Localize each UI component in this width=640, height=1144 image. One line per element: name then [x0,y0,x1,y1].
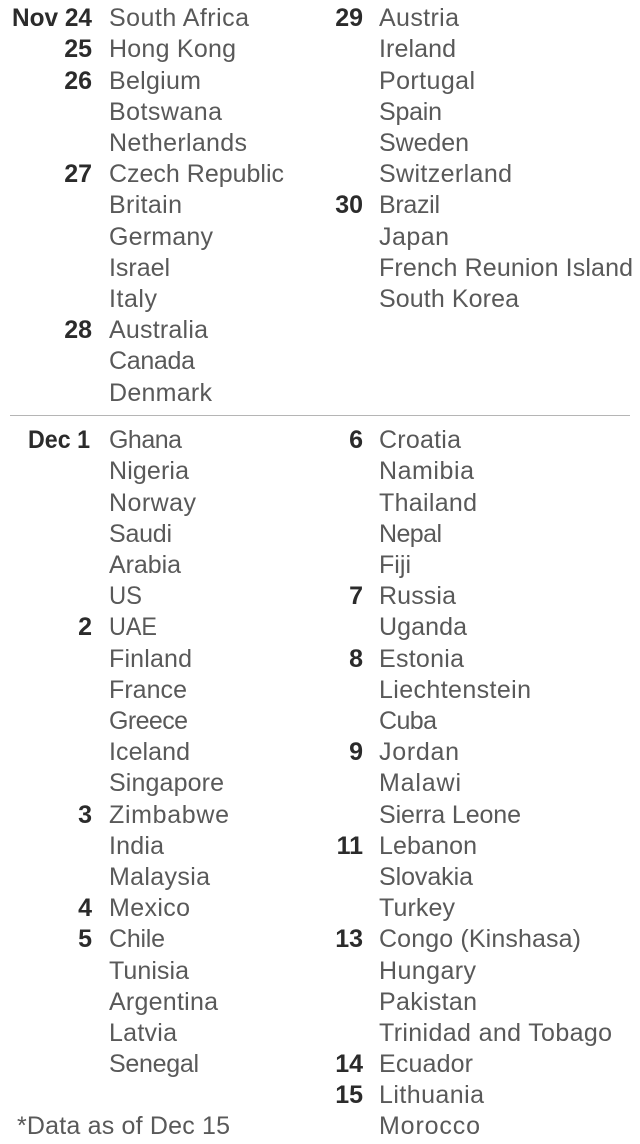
date group: Nov 28: Canada [109,347,195,375]
date group: Dec 8: Liechtenstein [379,676,531,704]
date group: Dec 9: Malawi [379,769,461,797]
date group: Dec 2: Iceland [109,738,190,766]
date group: Dec 5: Argentina [109,988,218,1016]
date group: Dec 6: 6 [349,426,363,454]
date group: Dec 13: 13 [335,925,363,953]
date group: Nov 28: Australia [109,316,208,344]
date group: Dec 3: Malaysia [109,863,210,891]
date group: Dec 5: Latvia [109,1019,177,1047]
date group: Dec 3: India [109,832,164,860]
date group: Dec 5: Senegal [109,1050,199,1078]
footnote: *Data as of Dec 15 [17,1112,230,1140]
date group: Dec 2 [78,613,224,797]
date group: Dec 11: 11 [337,832,363,860]
date group: Dec 1: Arabia [109,551,181,579]
date group: Dec 5: Chile [109,925,165,953]
date group: Nov 30: Brazil [379,191,440,219]
date group: Dec 6: Nepal [379,520,442,548]
date group: Nov 29 [335,4,512,188]
date group: Dec 5 [78,925,218,1078]
date group: Dec 2: Singapore [109,769,224,797]
date group: Dec 1: US [109,582,142,610]
date group: Dec 1: Nigeria [109,457,189,485]
date group: Nov 26: Netherlands [109,129,247,157]
date group: Dec 1: Saudi [109,520,172,548]
date group: Dec 7 [349,582,467,641]
date group: Dec 2: UAE [109,613,157,641]
panel: November dates, left column [12,4,284,407]
date group: Dec 1 [28,426,196,610]
panel: November dates, right column [335,4,633,313]
date group: Dec 8: Estonia [379,645,464,673]
date group: Dec 5: 5 [78,925,92,953]
date group: Nov 26: Belgium [109,67,201,95]
date group: Nov 28: 28 [64,316,92,344]
date group: Dec 15: Lithuania [379,1081,484,1109]
date group: Dec 8: Cuba [379,707,437,735]
date group: Nov 29: Sweden [379,129,469,157]
date group: Dec 15: Morocco [379,1112,480,1140]
date group: Dec 4: 4 [78,894,92,922]
date group: Dec 9: 9 [349,738,363,766]
date group: Nov 25: 25 [64,35,92,63]
date group: Dec 13: Hungary [379,957,476,985]
date group: Dec 9: Sierra Leone [379,801,521,829]
date group: Dec 6: Namibia [379,457,474,485]
date group: Dec 8: 8 [349,645,363,673]
date group: Nov 27: Israel [109,254,170,282]
date group: Dec 3 [78,801,229,891]
date group: Dec 6: Croatia [379,426,461,454]
date group: Dec 3: 3 [78,801,92,829]
date group: Nov 27: Czech Republic [109,160,284,188]
date group: Dec 14: 14 [335,1050,363,1078]
date group: Dec 13 [335,925,612,1047]
date group: Nov 30: South Korea [379,285,519,313]
date group: Dec 15: 15 [335,1081,363,1109]
date group: Dec 1: Ghana [109,426,182,454]
date group: Dec 8 [349,645,531,735]
date group: Nov 29: Switzerland [379,160,512,188]
date group: Dec 2: Finland [109,645,192,673]
date group: Nov 27: Italy [109,285,158,313]
date group: Dec 13: Congo (Kinshasa) [379,925,581,953]
date group: Nov 30: Japan [379,223,449,251]
date group: Nov 27: Germany [109,223,214,251]
date group: Nov 24: Nov 24 [12,4,92,32]
date group: Nov 30 [335,191,633,313]
date group: Nov 29: 29 [335,4,363,32]
date group: Nov 26 [64,67,247,157]
date group: Nov 27: 27 [64,160,92,188]
date group: Dec 6 [349,426,477,579]
date group: Nov 27: Britain [109,191,182,219]
date group: Dec 2: 2 [78,613,92,641]
date group: Nov 28: Denmark [109,379,212,407]
date group: Dec 14 [335,1050,473,1078]
date group: Nov 30: 30 [335,191,363,219]
date group: Dec 14: Ecuador [379,1050,473,1078]
date group: Nov 24 [12,4,249,32]
date group: Nov 26: Botswana [109,98,222,126]
date group: Nov 27 [64,160,284,313]
date group: Dec 6: Fiji [379,551,411,579]
date group: Dec 11 [337,832,477,922]
date group: Dec 2: France [109,676,187,704]
date group: Dec 1: Norway [109,489,196,517]
date group: Nov 26: 26 [64,67,92,95]
date group: Dec 5: Tunisia [109,957,189,985]
date group: Dec 3: Zimbabwe [109,801,229,829]
date group: Dec 15 [335,1081,484,1140]
panel: December dates, right column [335,426,612,1140]
date group: Nov 28 [64,316,212,407]
date group: Nov 25: Hong Kong [109,35,236,63]
date group: Dec 9 [349,738,521,829]
date group: Dec 11: Turkey [379,894,456,922]
date group: Dec 6: Thailand [379,489,477,517]
date group: Nov 30: French Reunion Island [379,254,633,282]
date group: Dec 7: 7 [349,582,363,610]
date group: Dec 9: Jordan [379,738,459,766]
date group: Nov 29: Spain [379,98,442,126]
date group: Nov 29: Portugal [379,67,475,95]
date group: Dec 11: Slovakia [379,863,473,891]
date group: Nov 24: South Africa [109,4,249,32]
panel: December dates, left column [28,426,229,1078]
date group: Dec 4: Mexico [109,894,190,922]
date group: Dec 7: Uganda [379,613,467,641]
date group: Dec 2: Greece [109,707,188,735]
date group: Dec 13: Trinidad and Tobago [379,1019,612,1047]
date group: Nov 29: Ireland [379,35,456,63]
date group: Dec 11: Lebanon [379,832,477,860]
date group: Dec 7: Russia [379,582,456,610]
date group: Nov 29: Austria [379,4,459,32]
date group: Dec 1: Dec 1 [28,426,90,454]
date group: Dec 13: Pakistan [379,988,477,1016]
